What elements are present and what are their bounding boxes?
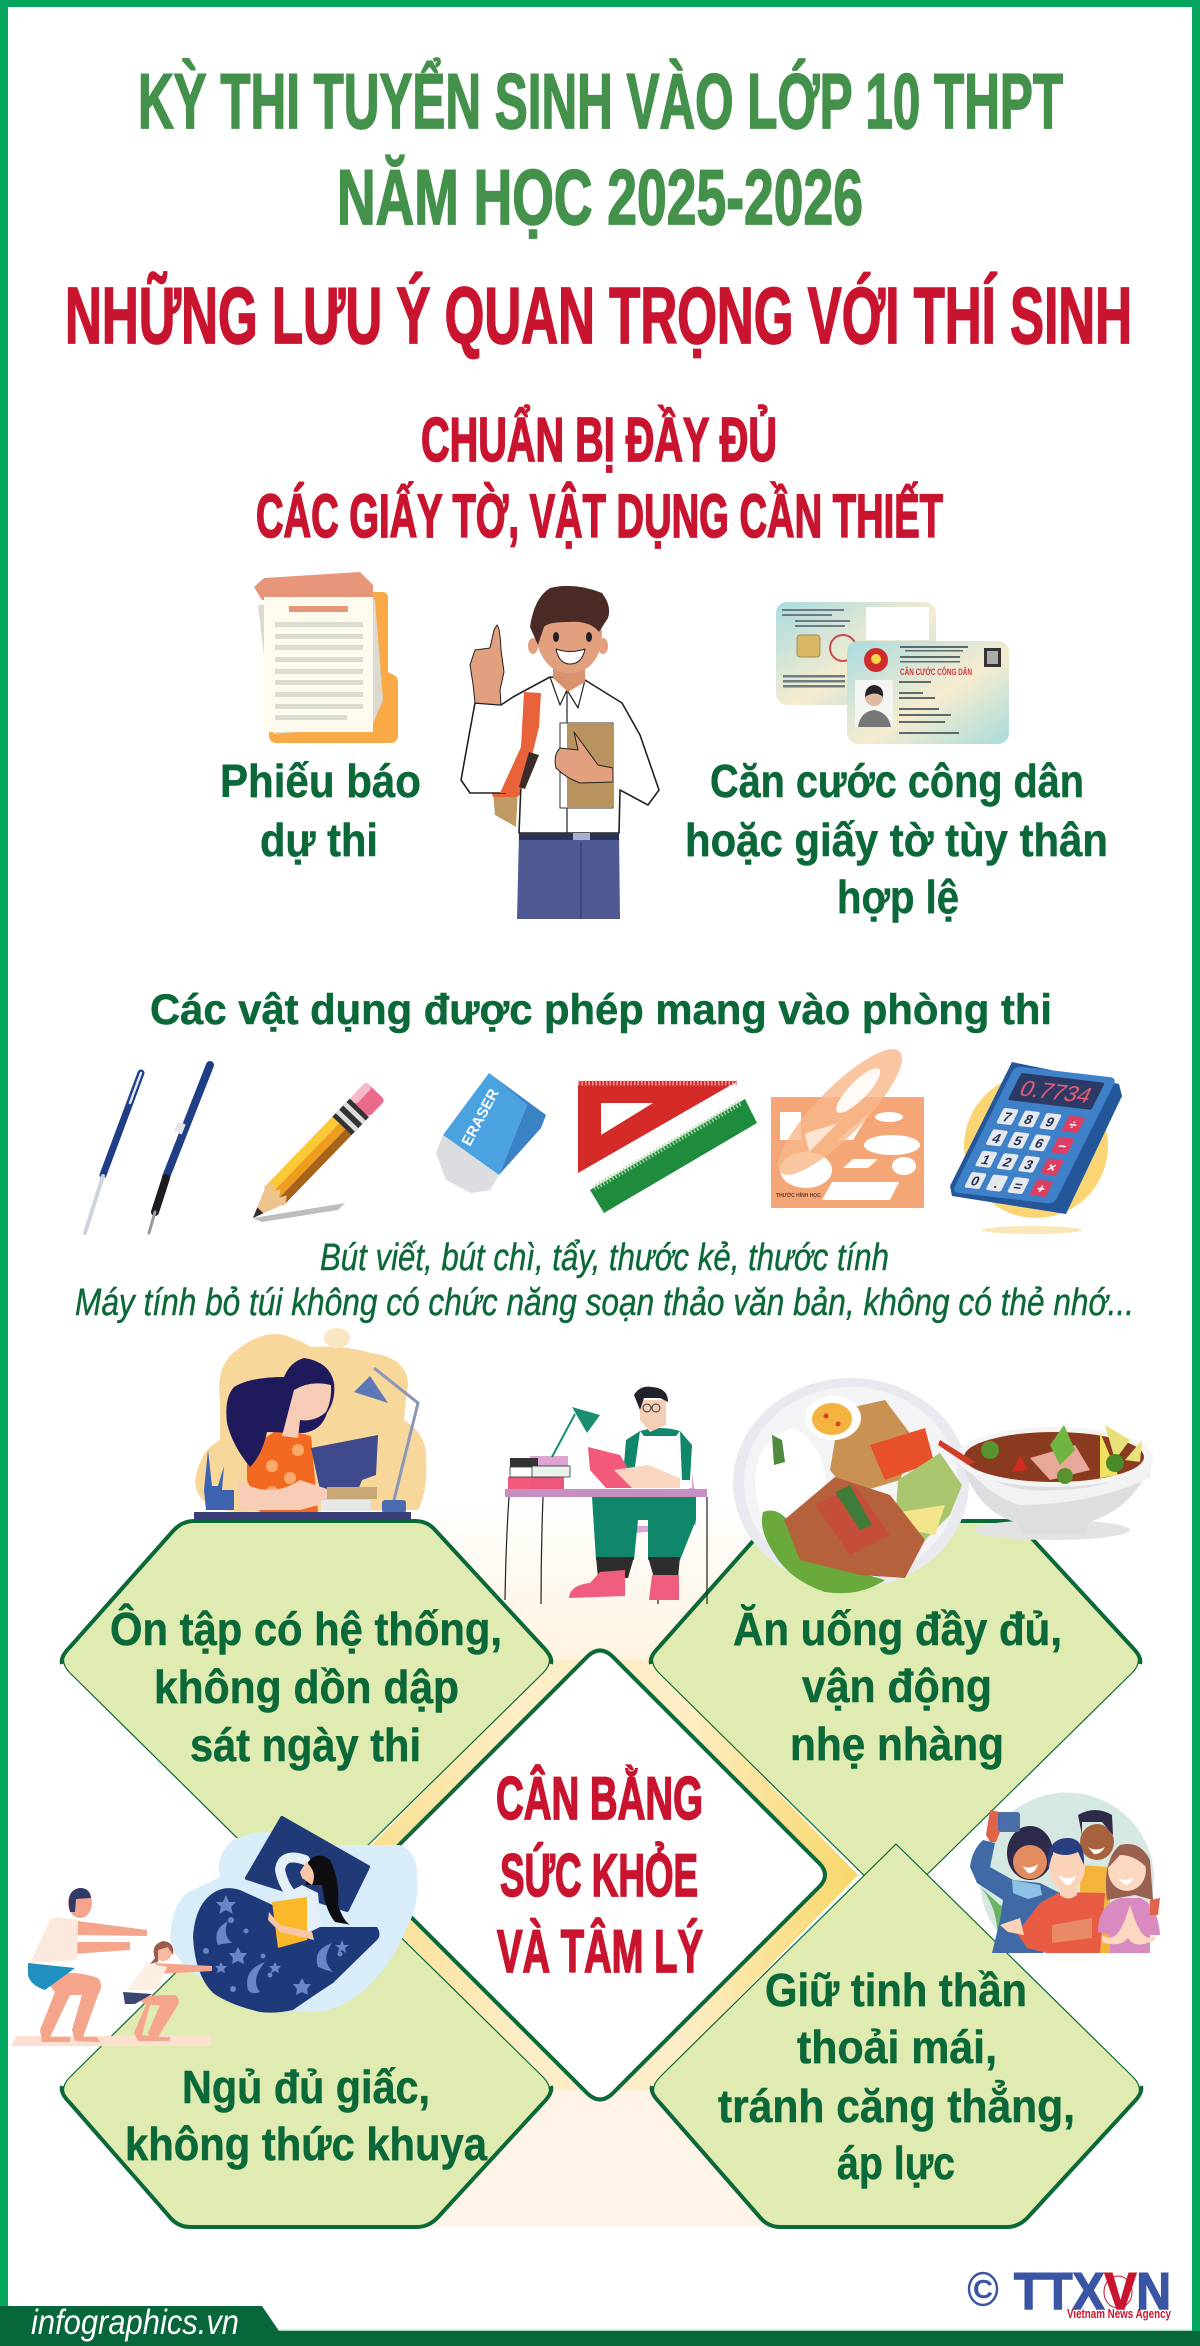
- text: ôn tập có hệ thống: Ôn tập có hệ thống,: [110, 1603, 502, 1655]
- neck and head: [553, 665, 585, 692]
- raised hand: [470, 625, 504, 705]
- text: căn cước công dân: hoặc giấy tờ tùy thân: [685, 814, 1108, 866]
- text: cân bằng sức khỏe và tâm lý: CÂN BẰNG: [496, 1765, 703, 1832]
- text: phiếu báo dự thi: Phiếu báo: [220, 755, 421, 807]
- pants: [517, 833, 620, 919]
- icon: calculator: =: [1011, 1179, 1025, 1194]
- icon: calculator: [950, 1062, 1122, 1234]
- icon: broken rice plate: [733, 1378, 969, 1593]
- icon: calculator: −: [1055, 1139, 1070, 1154]
- icon: calculator: 5: [1011, 1134, 1025, 1148]
- text: ăn uống đầy đủ: [733, 1603, 1062, 1770]
- icon: calculator: 0: [968, 1174, 983, 1189]
- text: giữ tinh thần: áp lực: [837, 2137, 955, 2189]
- heading: các vật dụng được phép: Các vật dụng được phép mang vào phòng thi: [150, 986, 1052, 1034]
- text: giữ tinh thần: tránh căng thẳng,: [718, 2079, 1075, 2132]
- icon: girl studying with lamp: [194, 1328, 426, 1519]
- icon: shape stencil and template: [763, 1035, 924, 1208]
- panel: ôn tập: [62, 1521, 551, 1906]
- book and hand: [560, 723, 613, 808]
- icon: pencil: [243, 1082, 385, 1227]
- text: ôn tập có hệ thống: không dồn dập: [154, 1661, 459, 1713]
- panel background: peach glow: [430, 1500, 770, 2227]
- icon: group of friends taking a selfie: [970, 1793, 1160, 1953]
- icon: young man reading at desk: [505, 1387, 707, 1604]
- icon: calculator: 9: [1043, 1115, 1058, 1130]
- icon: calculator: 6: [1032, 1136, 1047, 1151]
- text: ôn tập có hệ thống: [110, 1603, 502, 1771]
- text: ôn tập có hệ thống: sát ngày thi: [190, 1719, 421, 1771]
- source label: infographics.vn: [31, 2303, 239, 2342]
- text: ăn uống đầy đủ: nhẹ nhàng: [790, 1718, 1004, 1770]
- text: cân bằng sức khỏe và tâm lý: [496, 1765, 703, 1985]
- title: NĂM HỌC 2025-2026: [337, 153, 863, 241]
- icon: calculator: ×: [1044, 1160, 1059, 1175]
- text: căn cước công dân: [685, 755, 1108, 923]
- text: ăn uống đầy đủ: Ăn uống đầy đủ,: [733, 1603, 1062, 1655]
- logo: TTXVN: TTXVN: [1014, 2263, 1171, 2321]
- icon: calculator: ÷: [1066, 1118, 1081, 1132]
- backpack: [492, 770, 519, 827]
- heading: chuẩn bị đầy đủ: CHUẨN BỊ ĐẦY ĐỦ: [421, 406, 777, 475]
- footer bar: [0, 2306, 1200, 2346]
- text: ăn uống đầy đủ: vận động: [802, 1660, 992, 1712]
- shirt: [461, 677, 659, 833]
- icon: folder with exam slip: [254, 572, 398, 743]
- icon: citizen ID cards: [776, 602, 1009, 744]
- icon: calculator: +: [1034, 1182, 1048, 1196]
- text: ngủ đủ giấc: [125, 2061, 487, 2170]
- heading: chuẩn bị đầy đủ: [256, 406, 943, 550]
- text: ngủ đủ giấc: không thức khuya: [125, 2118, 487, 2170]
- icon: woman sleeping under starry duvet: [170, 1818, 418, 2013]
- text: phiếu báo dự thi: dự thi: [260, 814, 378, 866]
- icon: calculator: 3: [1022, 1158, 1036, 1172]
- panel: centre diamond: [375, 1650, 825, 2100]
- icon: calculator: 1: [979, 1153, 993, 1167]
- title: [65, 57, 1132, 360]
- icon: set square and ruler: [578, 1081, 757, 1213]
- logo: TTXVN: C: [973, 2274, 993, 2304]
- panel: ăn uống: [651, 1521, 1140, 1906]
- icon: pens: [85, 1065, 210, 1233]
- icon: parent and child doing squats: [11, 1888, 212, 2046]
- icon: calculator: 8: [1022, 1112, 1036, 1127]
- icon: calculator: 7: [1000, 1110, 1015, 1125]
- text: allowed items list: Bút viết, bút chì, tẩy, thước kẻ, thước tính: [320, 1237, 889, 1279]
- text: giữ tinh thần: Giữ tinh thần: [765, 1964, 1027, 2016]
- icon: eraser: [436, 1073, 546, 1193]
- icon: citizen ID cards: CĂN CƯỚC CÔNG DÂN: [900, 666, 972, 677]
- panel: ngủ đủ giấc: [62, 1844, 551, 2227]
- gold band behind centre: [342, 1660, 858, 2090]
- icon: calculator: 2: [1000, 1155, 1015, 1170]
- icon: eraser: ERASER: [459, 1086, 503, 1149]
- text: cân bằng sức khỏe và tâm lý: VÀ TÂM LÝ: [497, 1918, 703, 1985]
- icon: shape stencil and template: THƯỚC HÌNH HỌC: [776, 1191, 821, 1199]
- text: giữ tinh thần: thoải mái,: [797, 2021, 997, 2073]
- icon: student pointing up: [461, 586, 659, 919]
- text: ngủ đủ giấc: Ngủ đủ giấc,: [182, 2061, 430, 2113]
- belt: [519, 833, 619, 840]
- text: allowed items list: [75, 1237, 1134, 1324]
- text: căn cước công dân: hợp lệ: [837, 871, 959, 923]
- icon: calculator: 0.7734: [1015, 1076, 1097, 1108]
- icon: calculator: .: [991, 1177, 1002, 1191]
- text: cân bằng sức khỏe và tâm lý: SỨC KHỎE: [500, 1842, 698, 1909]
- icon: pho bowl: [938, 1425, 1153, 1540]
- text: căn cước công dân: Căn cước công dân: [710, 755, 1084, 807]
- panel: giữ tinh thần: [652, 1844, 1141, 2227]
- icon: calculator: 4: [989, 1131, 1004, 1146]
- text: giữ tinh thần: [718, 1964, 1075, 2189]
- text: phiếu báo dự thi: [220, 755, 421, 866]
